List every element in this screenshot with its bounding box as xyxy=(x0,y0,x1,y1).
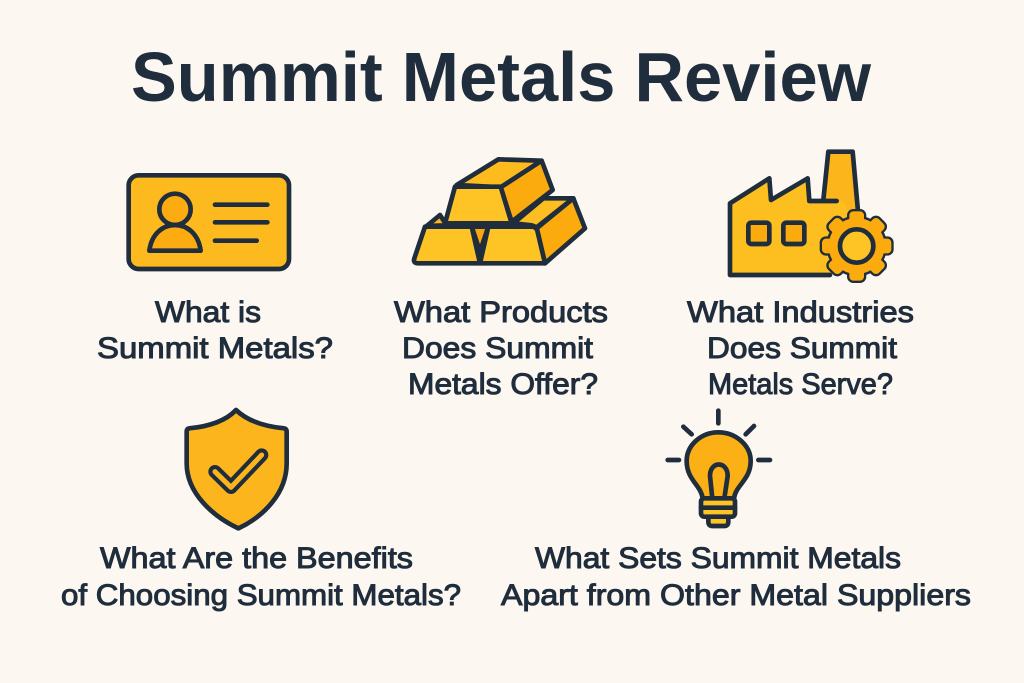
label: What Sets Summit Metals Apart from Other Metal Suppliers xyxy=(501,542,971,612)
label: What Products Does Summit Metals Offer?: Metals Offer? xyxy=(408,368,598,401)
icon: gold bars xyxy=(414,159,585,263)
icon: light bulb xyxy=(668,411,770,526)
icon: shield with check xyxy=(187,410,287,528)
icon: factory with gear xyxy=(730,152,891,281)
label: What is Summit Metals?: Summit Metals? xyxy=(97,332,333,365)
label: What Products Does Summit Metals Offer? xyxy=(394,296,608,401)
label: What Products Does Summit Metals Offer?: Does Summit xyxy=(402,332,593,365)
label: What Are the Benefits of Choosing Summit Metals? xyxy=(61,542,461,612)
label: What Industries Does Summit Metals Serve?: Metals Serve? xyxy=(708,368,893,401)
label: What is Summit Metals? xyxy=(97,296,333,365)
label: What Industries Does Summit Metals Serve?: What Industries xyxy=(687,296,914,329)
label: What Are the Benefits of Choosing Summit Metals?: of Choosing Summit Metals? xyxy=(61,579,461,612)
label: What Sets Summit Metals Apart from Other Metal Suppliers: What Sets Summit Metals xyxy=(535,542,901,575)
title: Summit Metals Review xyxy=(131,38,872,116)
label: What Sets Summit Metals Apart from Other Metal Suppliers: Apart from Other Metal Suppliers xyxy=(501,579,971,612)
label: What Are the Benefits of Choosing Summit Metals?: What Are the Benefits xyxy=(100,542,413,575)
icon: ID card xyxy=(129,175,289,269)
label: What Industries Does Summit Metals Serve?: Does Summit xyxy=(707,332,897,365)
label: What is Summit Metals?: What is xyxy=(155,296,261,329)
label: What Products Does Summit Metals Offer?: What Products xyxy=(394,296,608,329)
label: What Industries Does Summit Metals Serve? xyxy=(687,296,914,401)
